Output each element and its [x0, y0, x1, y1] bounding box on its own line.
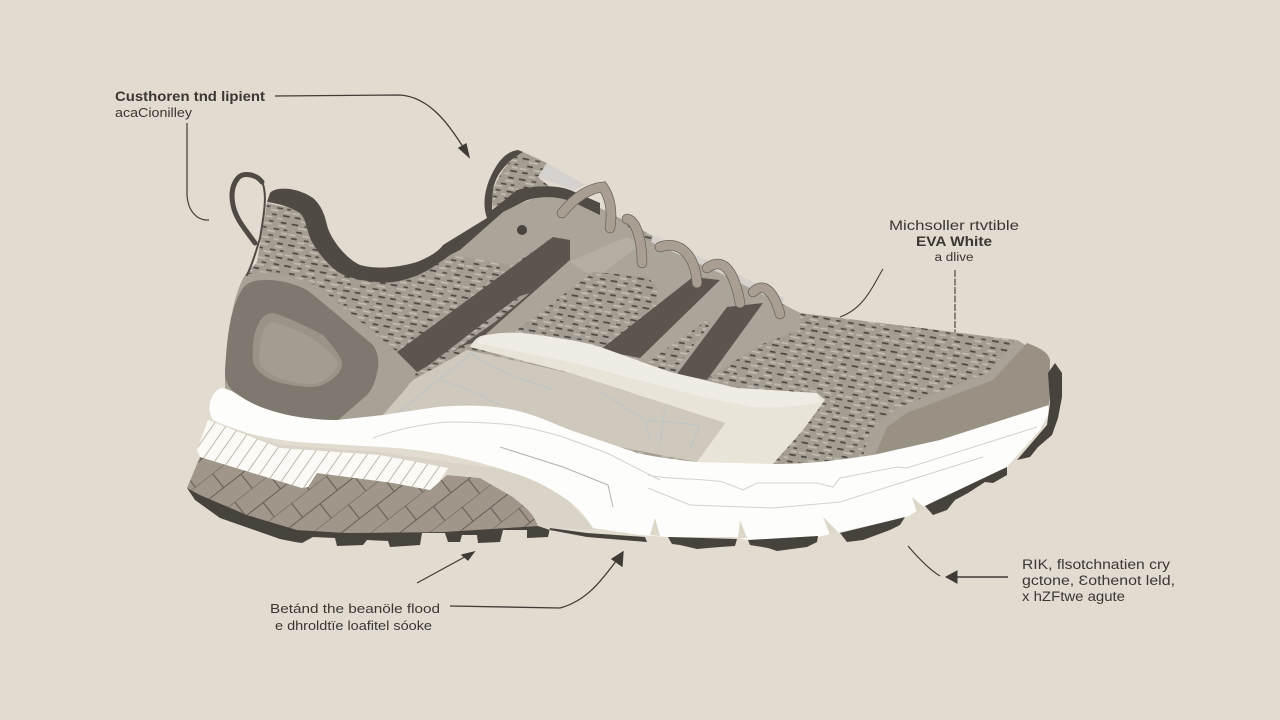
mesh window small [648, 320, 712, 372]
callout: bottom left: e dhroldtïe loafitel sóoke [275, 618, 432, 633]
heel counter outer [225, 273, 417, 421]
speckled cream strip [477, 333, 820, 407]
translucent side panel [383, 350, 725, 462]
callout: bottom left: Betánd the beanöle flood [270, 601, 440, 616]
callout: top left: acaCionilley [115, 106, 193, 120]
arrow: bottom left to forefoot [450, 552, 623, 608]
callout: bottom right [1022, 557, 1175, 604]
callout: bottom left [270, 601, 440, 633]
callout: top left: Custhoren tnd lipient [115, 89, 266, 104]
arrow: bottom right [946, 571, 1008, 583]
arrow: short to tread [417, 552, 474, 583]
callout: top left [115, 89, 266, 120]
dark stripe front [677, 303, 763, 380]
leader: midfoot [840, 269, 883, 317]
heel pull loop [232, 175, 265, 275]
dark stripe rear [397, 237, 570, 372]
callout: EVA White: EVA White [916, 233, 992, 249]
leader: heel loop [187, 123, 209, 220]
leader: bottom right curve [908, 546, 940, 576]
ribbed band [197, 420, 448, 490]
heel counter mid tone [225, 280, 378, 421]
tongue top strip [538, 163, 585, 190]
tread [187, 457, 538, 533]
midsole teeth [650, 497, 925, 538]
outsole rear dark [187, 488, 647, 547]
callout: bottom right: RIK, flsotchnatien cry [1022, 557, 1170, 572]
collar and tongue binding [267, 150, 600, 283]
leader: vertical to toe mesh [954, 270, 956, 332]
light highlight on eyestay [570, 237, 640, 275]
panel veins [395, 352, 700, 450]
lace gap strip [650, 235, 785, 306]
front outsole lugs [668, 363, 1062, 551]
upper mesh [225, 203, 1050, 470]
arrow: top left to tongue [275, 95, 469, 157]
eyestay overlay [450, 195, 800, 378]
callout: bottom right: x hZFtwe agute [1022, 589, 1125, 604]
mesh strip inside stripe [420, 293, 530, 372]
mesh window middle [505, 272, 657, 350]
callout: bottom right: gctone, Ɛothenot leld, [1022, 573, 1175, 588]
dark stripe middle [600, 277, 720, 358]
heel window inner [260, 322, 338, 384]
toe cap dark [873, 343, 1050, 460]
toe cap light band [862, 340, 1050, 460]
cream overlay [470, 333, 825, 465]
illustration: running shoe [187, 150, 1062, 551]
heel window outer [253, 313, 342, 387]
laces [562, 187, 780, 314]
callout: EVA White: Michsoller rtvtible [889, 218, 1019, 233]
tongue mesh [493, 152, 550, 208]
midfoot strip beige [210, 422, 595, 530]
callout: EVA White: a dlive [934, 252, 974, 264]
midsole contour lines [373, 422, 1037, 508]
white midsole [209, 388, 1049, 540]
callout: EVA White [889, 218, 1019, 264]
eyelet [517, 225, 527, 235]
